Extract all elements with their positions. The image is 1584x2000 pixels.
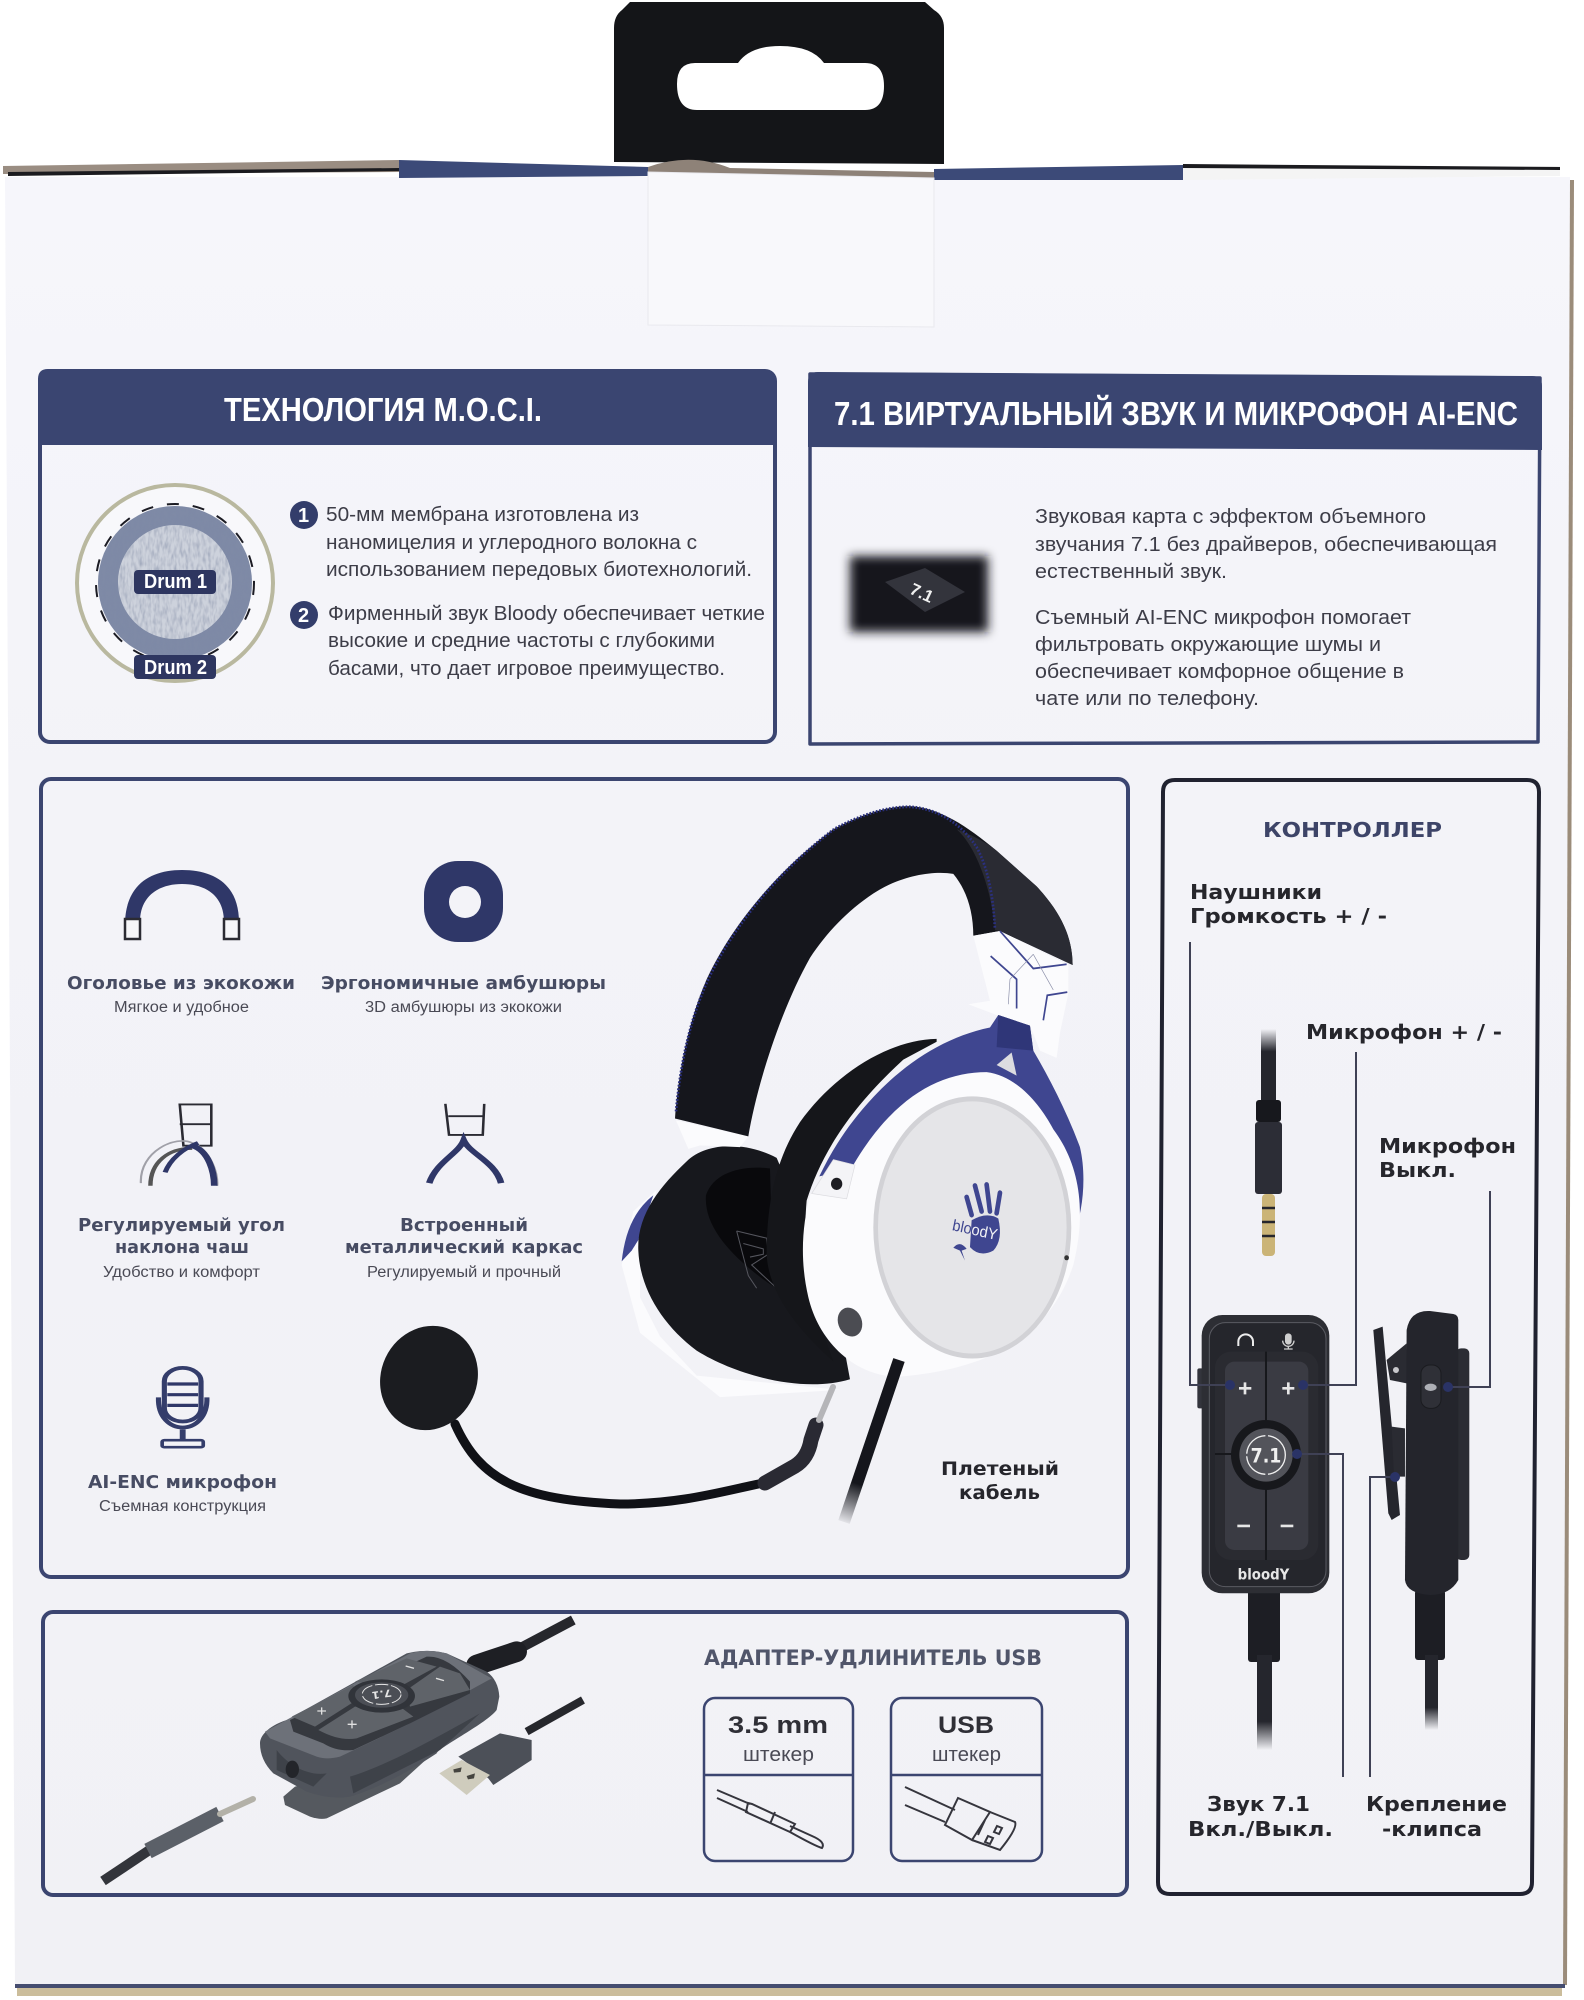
item 2	[290, 601, 765, 680]
label: headphone volume	[1190, 880, 1387, 928]
label: 7.1 toggle: Звук 7.1	[1207, 1792, 1310, 1816]
image: controller front	[1197, 1315, 1329, 1593]
icon: microphone	[158, 1368, 207, 1447]
image: sound chip: 7.1	[907, 580, 936, 607]
panel: controller	[1158, 780, 1539, 1894]
feature: cup angle: Регулируемый угол	[78, 1216, 285, 1236]
feature: microphone: Съемная конструкция	[99, 1498, 266, 1515]
card: USB: штекер	[932, 1744, 1001, 1766]
image: headset	[363, 806, 1083, 1522]
feature: microphone	[88, 1473, 277, 1515]
item 1: 1	[298, 505, 309, 527]
heading: 7.1 ВИРТУАЛЬНЫЙ ЗВУК И МИКРОФОН AI-ENC	[834, 394, 1518, 432]
image: 3.5 mm plug and cable	[103, 1799, 253, 1881]
heading: АДАПТЕР-УДЛИНИТЕЛЬ USB	[704, 1646, 1042, 1670]
near cup	[803, 1072, 1080, 1377]
feature: cup angle: Удобство и комфорт	[103, 1264, 260, 1281]
headband	[675, 806, 1073, 1136]
image: USB adapter: 7.1	[371, 1686, 392, 1700]
near ear pad crescent	[767, 1039, 937, 1361]
image: 3.5 mm jack	[1255, 1029, 1282, 1256]
box flap	[648, 172, 934, 327]
feature: microphone: AI-ENC микрофон	[88, 1473, 277, 1493]
text block: фильтровать окружающие шумы и	[1035, 634, 1381, 656]
label: braided cable: Плетеный	[941, 1458, 1059, 1480]
feature: metal frame: Встроенный	[400, 1216, 528, 1236]
logo: Bloody hand: bloodY	[951, 1217, 999, 1244]
panel: M.O.C.I. technology	[38, 369, 776, 742]
mic boom	[455, 1424, 763, 1504]
feature: cup angle	[78, 1216, 285, 1281]
far ear pad	[638, 1146, 850, 1384]
image: controller cables	[1248, 1590, 1445, 1750]
icon: headband	[125, 870, 239, 939]
item 1: 50-мм мембрана изготовлена из	[326, 504, 639, 526]
panel: USB adapter	[43, 1612, 1127, 1895]
icon: speaker membrane: Drum 2	[144, 657, 207, 679]
image: USB adapter	[260, 1620, 583, 1819]
hang tab	[614, 2, 944, 164]
label: mic volume: Микрофон + / -	[1306, 1020, 1502, 1044]
feature: cup angle: наклона чаш	[115, 1238, 249, 1258]
card: 3.5 mm	[704, 1698, 853, 1861]
item 1: наномицелия и углеродного волокна с	[326, 532, 697, 554]
text block: обеспечивает комфорное общение в	[1035, 661, 1404, 683]
mic foam	[363, 1310, 495, 1446]
label: clip	[1366, 1792, 1507, 1841]
slider	[968, 931, 1068, 1058]
feature: ear cushions: Эргономичные амбушюры	[321, 974, 606, 994]
image: sound chip	[850, 556, 988, 632]
far cup shell	[622, 1190, 840, 1397]
item 2: Фирменный звук Bloody обеспечивает четкие	[328, 603, 765, 625]
label: clip: -клипса	[1382, 1817, 1482, 1841]
headband lug	[676, 1120, 748, 1149]
icon: 3.5 mm plug	[717, 1790, 823, 1848]
label: braided cable	[941, 1458, 1059, 1504]
item 2: басами, что дает игровое преимущество.	[328, 658, 725, 680]
label: mic mute: Выкл.	[1379, 1158, 1456, 1182]
label: braided cable: кабель	[959, 1482, 1040, 1504]
panel header	[38, 369, 776, 445]
feature: ear cushions: 3D амбушюры из экокожи	[365, 999, 562, 1016]
text block: звучания 7.1 без драйверов, обеспечивающая	[1035, 534, 1497, 556]
box right edge	[1565, 180, 1572, 1985]
text block: чате или по телефону.	[1035, 688, 1259, 710]
text block: Съемный AI-ENC микрофон помогает	[1035, 607, 1411, 629]
label: mic mute: Микрофон	[1379, 1134, 1516, 1158]
text block	[1035, 506, 1497, 710]
text block: естественный звук.	[1035, 561, 1227, 583]
feature: metal frame: металлический каркас	[345, 1238, 583, 1258]
fork	[819, 1015, 1083, 1236]
icon: ear cushion	[424, 861, 503, 942]
feature: headband	[67, 974, 295, 1016]
item 2: высокие и средние частоты с глубокими	[328, 630, 715, 652]
icon: adjustable cup angle	[141, 1104, 217, 1186]
label: headphone volume: Наушники	[1190, 880, 1322, 904]
image: controller front: bloodY	[1238, 1565, 1290, 1583]
card: 3.5 mm: штекер	[743, 1744, 814, 1766]
feature: metal frame: Регулируемый и прочный	[367, 1264, 561, 1281]
item 2: 2	[298, 605, 309, 627]
item 1	[290, 501, 752, 581]
label: mic mute	[1379, 1134, 1516, 1182]
label: 7.1 toggle: Вкл./Выкл.	[1188, 1817, 1333, 1841]
item 1: использованием передовых биотехнологий.	[326, 559, 752, 581]
card: USB	[891, 1698, 1042, 1861]
label: clip: Крепление	[1366, 1792, 1507, 1816]
icon: USB plug	[905, 1787, 1015, 1850]
heading: КОНТРОЛЛЕР	[1263, 818, 1442, 842]
feature: headband: Мягкое и удобное	[114, 999, 249, 1016]
heading: ТЕХНОЛОГИЯ M.O.C.I.	[224, 391, 542, 428]
logo: Bloody hand	[951, 1185, 1000, 1261]
label: headphone volume: Громкость + / -	[1190, 904, 1387, 928]
mic connector	[765, 1425, 816, 1483]
feature: metal frame	[345, 1216, 583, 1281]
feature: headband: Оголовье из экокожи	[67, 974, 295, 994]
image: controller side	[1373, 1311, 1469, 1595]
cable	[844, 1360, 899, 1522]
label: 7.1 toggle	[1188, 1792, 1333, 1841]
panel header	[808, 372, 1542, 450]
icon: metal frame	[429, 1104, 501, 1183]
panel: 7.1 virtual sound	[808, 372, 1542, 744]
card: 3.5 mm: 3.5 mm	[728, 1712, 828, 1739]
callout lines	[1190, 942, 1490, 1777]
icon: speaker membrane	[77, 485, 273, 681]
image: controller front: 7.1	[1251, 1445, 1281, 1468]
card: USB: USB	[938, 1712, 994, 1739]
icon: speaker membrane: Drum 1	[144, 571, 207, 593]
box top edge	[3, 160, 1560, 180]
text block: Звуковая карта с эффектом объемного	[1035, 506, 1426, 528]
panel: headset features	[41, 779, 1128, 1577]
box bottom edge	[15, 1984, 1565, 1996]
feature: ear cushions	[321, 974, 606, 1016]
